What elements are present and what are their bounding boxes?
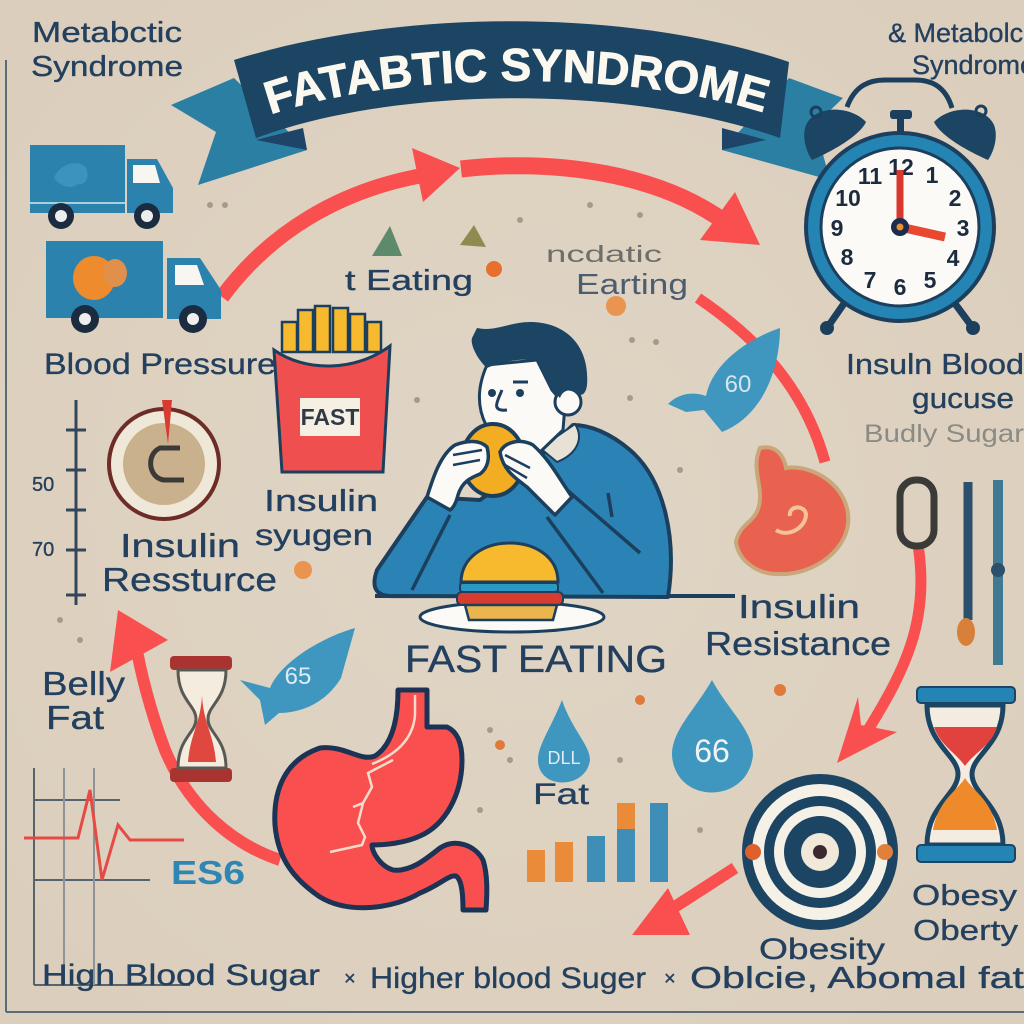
corner label: right: & Metabolc [888, 18, 1023, 48]
chart: left gauge axis: 70 [32, 539, 54, 561]
label: belly fat [42, 665, 126, 736]
label: eating left [345, 225, 502, 297]
label: blood pressure: Blood Pressure [44, 348, 276, 381]
bottom label row [42, 959, 1024, 995]
icon: fish 1: 60 [725, 371, 751, 398]
label: eating right: Earting [576, 269, 688, 301]
corner label: left: Syndrome [31, 51, 183, 83]
corner label: left: Metabctic [32, 17, 182, 49]
icon: delivery truck top [30, 145, 173, 229]
label: insulin blood glucose [846, 349, 1024, 448]
icon: alarm clock: 1 [926, 162, 939, 188]
label: insulin resistance [705, 588, 891, 662]
label: belly fat: Fat [46, 699, 104, 736]
icon: drop large: 66 [694, 733, 730, 769]
icon: alarm clock: 2 [949, 185, 961, 211]
bottom label row: Oblcie, Abomal fat [690, 960, 1024, 995]
label: insulin resistance left: Insulin [120, 527, 240, 564]
icon: alarm clock: 9 [831, 215, 843, 241]
corner label: right [888, 18, 1024, 80]
icon: alarm clock: 11 [858, 163, 882, 189]
decorative speckles [57, 202, 786, 833]
icon: alarm clock: 6 [894, 274, 906, 300]
chart: heartbeat: ES6 [171, 854, 245, 891]
label: insulin syugen: Insulin [264, 483, 378, 518]
icon: delivery truck bottom [46, 241, 221, 333]
chart: left gauge axis: 50 [32, 474, 54, 496]
label: insulin syugen: syugen [255, 519, 373, 552]
label: insulin blood glucose: Insuln Blood [846, 349, 1024, 381]
icon: alarm clock: 8 [841, 244, 854, 270]
icon: alarm clock: 4 [947, 245, 960, 271]
icon: fish 2: 65 [285, 663, 311, 690]
icon: alarm clock: 7 [864, 267, 876, 293]
icon: alarm clock: 12 [888, 154, 914, 180]
bottom label row: × [344, 968, 356, 990]
icon: alarm clock: 3 [957, 215, 969, 241]
label: eating left: t Eating [345, 265, 473, 297]
icon: alarm clock: 5 [924, 267, 937, 293]
icon: fish 2 [240, 628, 355, 725]
bottom label row: × [664, 968, 676, 990]
label: insulin syugen [255, 483, 378, 552]
icon: fries box: FAST [301, 404, 359, 430]
label: obesity right [912, 880, 1019, 947]
icon: utensils [900, 480, 1005, 665]
label: obesity right: Oberty [913, 915, 1019, 947]
icon: alarm clock [804, 80, 996, 335]
bottom label row: High Blood Sugar [42, 959, 320, 992]
arrow: circular flow [110, 148, 921, 935]
label: eating right: ncdatic [546, 241, 662, 267]
label: insulin resistance: Insulin [738, 588, 860, 625]
label: obesity right: Obesy [912, 880, 1018, 912]
illustration: man eating a burger [374, 322, 735, 632]
icon: large stomach [275, 690, 487, 910]
icon: alarm clock: 10 [835, 185, 861, 211]
corner label: left [31, 17, 183, 83]
label: eating right [546, 241, 688, 316]
label: insulin resistance left: Ressturce [102, 561, 277, 598]
label: obesity target: Obesity [759, 933, 885, 966]
icon: fish 1 [668, 328, 780, 432]
label: fast eating: FAST EATING [405, 639, 667, 681]
icon: hourglass right [917, 687, 1015, 862]
icon: target [742, 774, 898, 930]
icon: small stomach [736, 447, 848, 574]
icon: drop large [672, 680, 753, 792]
chart: bars [527, 803, 668, 882]
icon: drop small [538, 700, 590, 782]
chart: heartbeat [24, 768, 245, 985]
label: fat: Fat [533, 778, 590, 811]
bottom label row: Higher blood Suger [370, 962, 646, 995]
icon: hourglass left [170, 656, 232, 782]
icon: drop small: DLL [547, 748, 581, 768]
label: insulin blood glucose: gucuse [912, 383, 1014, 415]
label: insulin resistance: Resistance [705, 625, 891, 662]
label: insulin resistance left [102, 527, 277, 598]
icon: fries box [274, 306, 390, 472]
icon: pressure gauge [109, 400, 219, 519]
title banner [171, 21, 843, 185]
label: belly fat: Belly [42, 665, 126, 702]
chart: left gauge axis [32, 400, 86, 605]
title banner: FATABTIC SYNDROME [263, 48, 770, 114]
label: insulin blood glucose: Budly Sugar [864, 420, 1024, 448]
